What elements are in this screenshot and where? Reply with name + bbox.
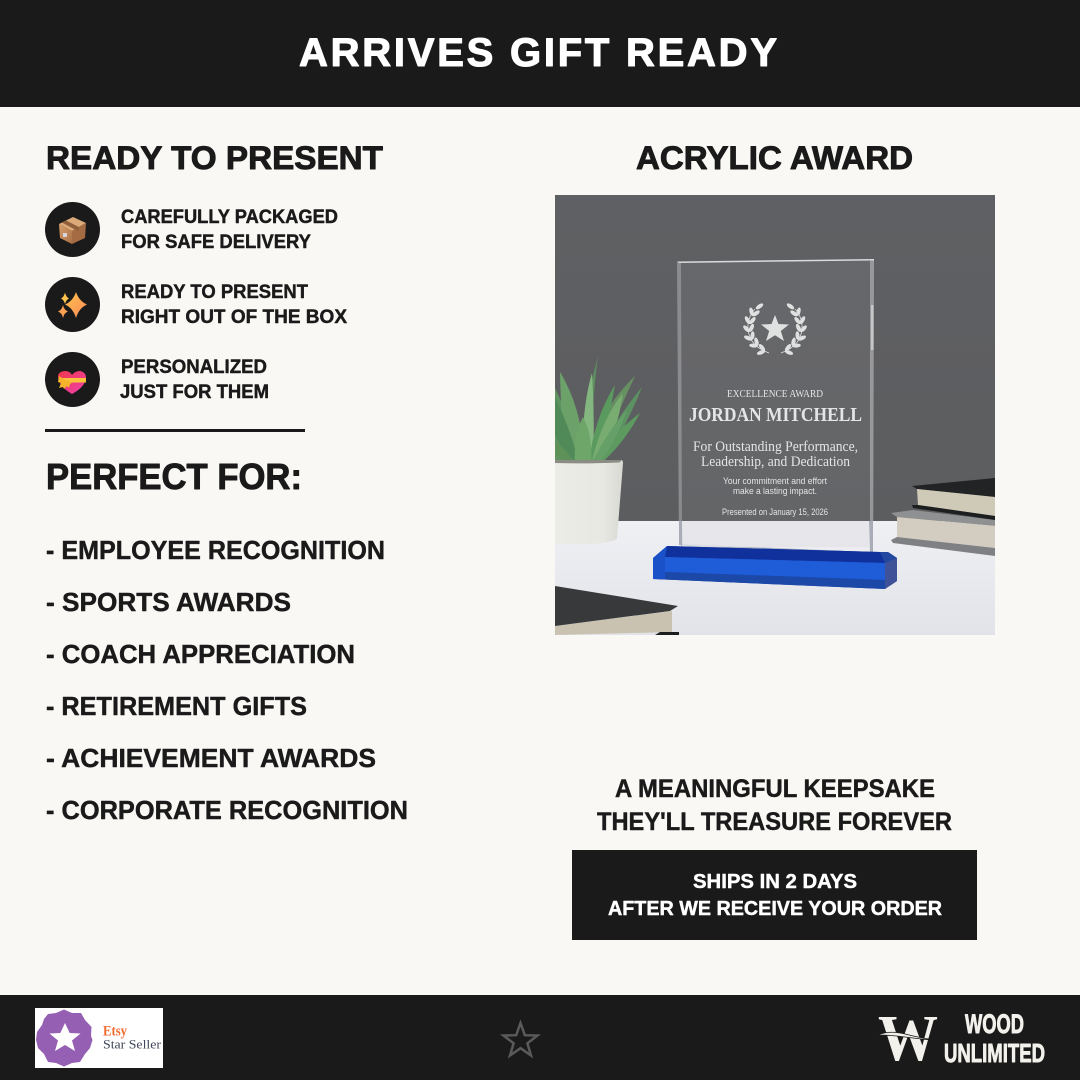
text: carefully packaged: FOR SAFE DELIVERY <box>121 232 311 253</box>
acrylic award <box>653 259 897 589</box>
text: ready to present: RIGHT OUT OF THE BOX <box>121 307 347 328</box>
footer band <box>0 995 1080 1080</box>
list: perfect for: - ACHIEVEMENT AWARDS <box>46 743 376 773</box>
engraved award text: make a lasting impact. <box>733 486 817 497</box>
text: ready to present <box>121 282 347 328</box>
engraved award text: Your commitment and effort <box>723 476 827 487</box>
shipping callout: AFTER WE RECEIVE YOUR ORDER <box>608 898 943 920</box>
engraved award text: Leadership, and Dedication <box>701 454 850 470</box>
logo: wood unlimited: W <box>878 1002 938 1075</box>
icon: heart with ribbon <box>45 352 100 407</box>
logo: wood unlimited <box>878 1002 1045 1075</box>
badge: etsy star seller: Star Seller <box>103 1038 162 1052</box>
shipping callout <box>572 850 977 940</box>
logo: wood unlimited: WOOD <box>965 1009 1024 1039</box>
feature: personalized <box>45 352 269 407</box>
shipping callout: SHIPS IN 2 DAYS <box>693 871 857 893</box>
text: personalized: JUST FOR THEM <box>120 382 269 403</box>
text: personalized: PERSONALIZED <box>121 357 267 378</box>
tagline <box>597 775 952 836</box>
stacked books <box>891 478 995 556</box>
engraved laurel and star <box>742 302 808 356</box>
engraved award text: For Outstanding Performance, <box>693 439 858 455</box>
text: personalized <box>120 357 269 403</box>
list: perfect for: - CORPORATE RECOGNITION <box>46 795 408 825</box>
foreground book <box>555 586 679 635</box>
plant pot <box>555 460 623 544</box>
icon: sparkles <box>45 277 100 332</box>
acrylic block <box>677 259 874 554</box>
feature: carefully packaged <box>45 202 338 257</box>
icon: package box <box>45 202 100 257</box>
heading: acrylic award: ACRYLIC AWARD <box>636 140 913 176</box>
text: ready to present: READY TO PRESENT <box>121 282 308 303</box>
header band <box>0 0 1080 107</box>
engraved award text: JORDAN MITCHELL <box>689 404 862 426</box>
list: perfect for: - RETIREMENT GIFTS <box>46 691 307 721</box>
title: ARRIVES GIFT READY <box>299 31 777 75</box>
engraved award text <box>689 389 862 517</box>
badge: etsy star seller: Etsy <box>103 1024 128 1040</box>
text: carefully packaged: CAREFULLY PACKAGED <box>121 207 338 228</box>
feature: ready to present <box>45 277 347 332</box>
tagline: A MEANINGFUL KEEPSAKE <box>615 775 935 803</box>
list: perfect for: - SPORTS AWARDS <box>46 587 291 617</box>
engraved award text: EXCELLENCE AWARD <box>727 389 823 400</box>
list: perfect for: - COACH APPRECIATION <box>46 639 355 669</box>
blue base <box>653 546 897 589</box>
heading: perfect for: PERFECT FOR: <box>46 456 302 497</box>
text: carefully packaged <box>121 207 338 253</box>
heading: ready to present: READY TO PRESENT <box>46 140 383 176</box>
plant <box>550 356 642 465</box>
engraved award text: Presented on January 15, 2026 <box>722 507 828 517</box>
icon: outline star <box>504 1023 538 1056</box>
list: perfect for <box>46 535 408 825</box>
tagline: THEY'LL TREASURE FOREVER <box>597 808 952 836</box>
badge: etsy star seller <box>35 1008 163 1068</box>
list: perfect for: - EMPLOYEE RECOGNITION <box>46 535 385 565</box>
product photo: acrylic award <box>550 195 995 635</box>
